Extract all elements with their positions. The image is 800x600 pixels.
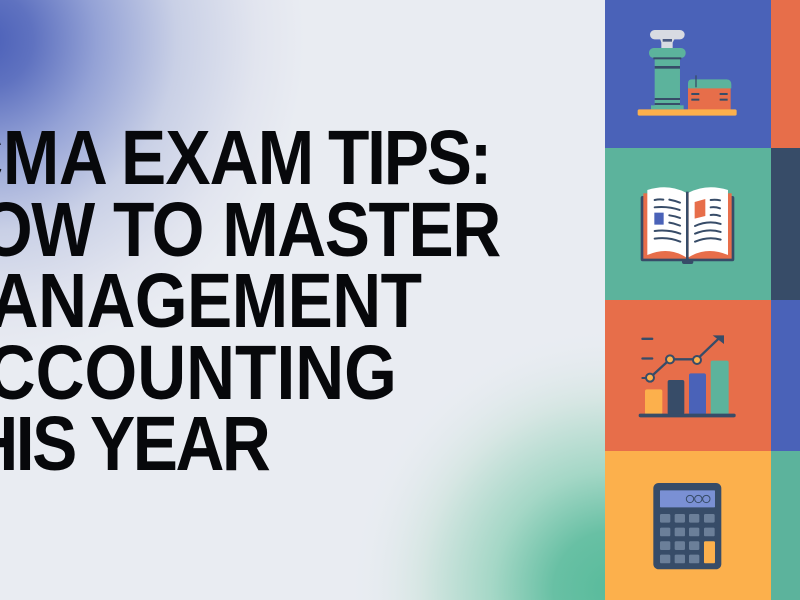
background gradient panel [0,0,606,600]
title: TIPS: [311,115,490,201]
icon: column and building [638,30,737,116]
icon: open book [641,187,734,264]
title: EXAM [103,115,313,201]
icon: bar chart with trend line [639,335,736,417]
icon: calculator [653,483,721,569]
panel: colour tile grid [605,0,800,600]
title [0,115,500,487]
